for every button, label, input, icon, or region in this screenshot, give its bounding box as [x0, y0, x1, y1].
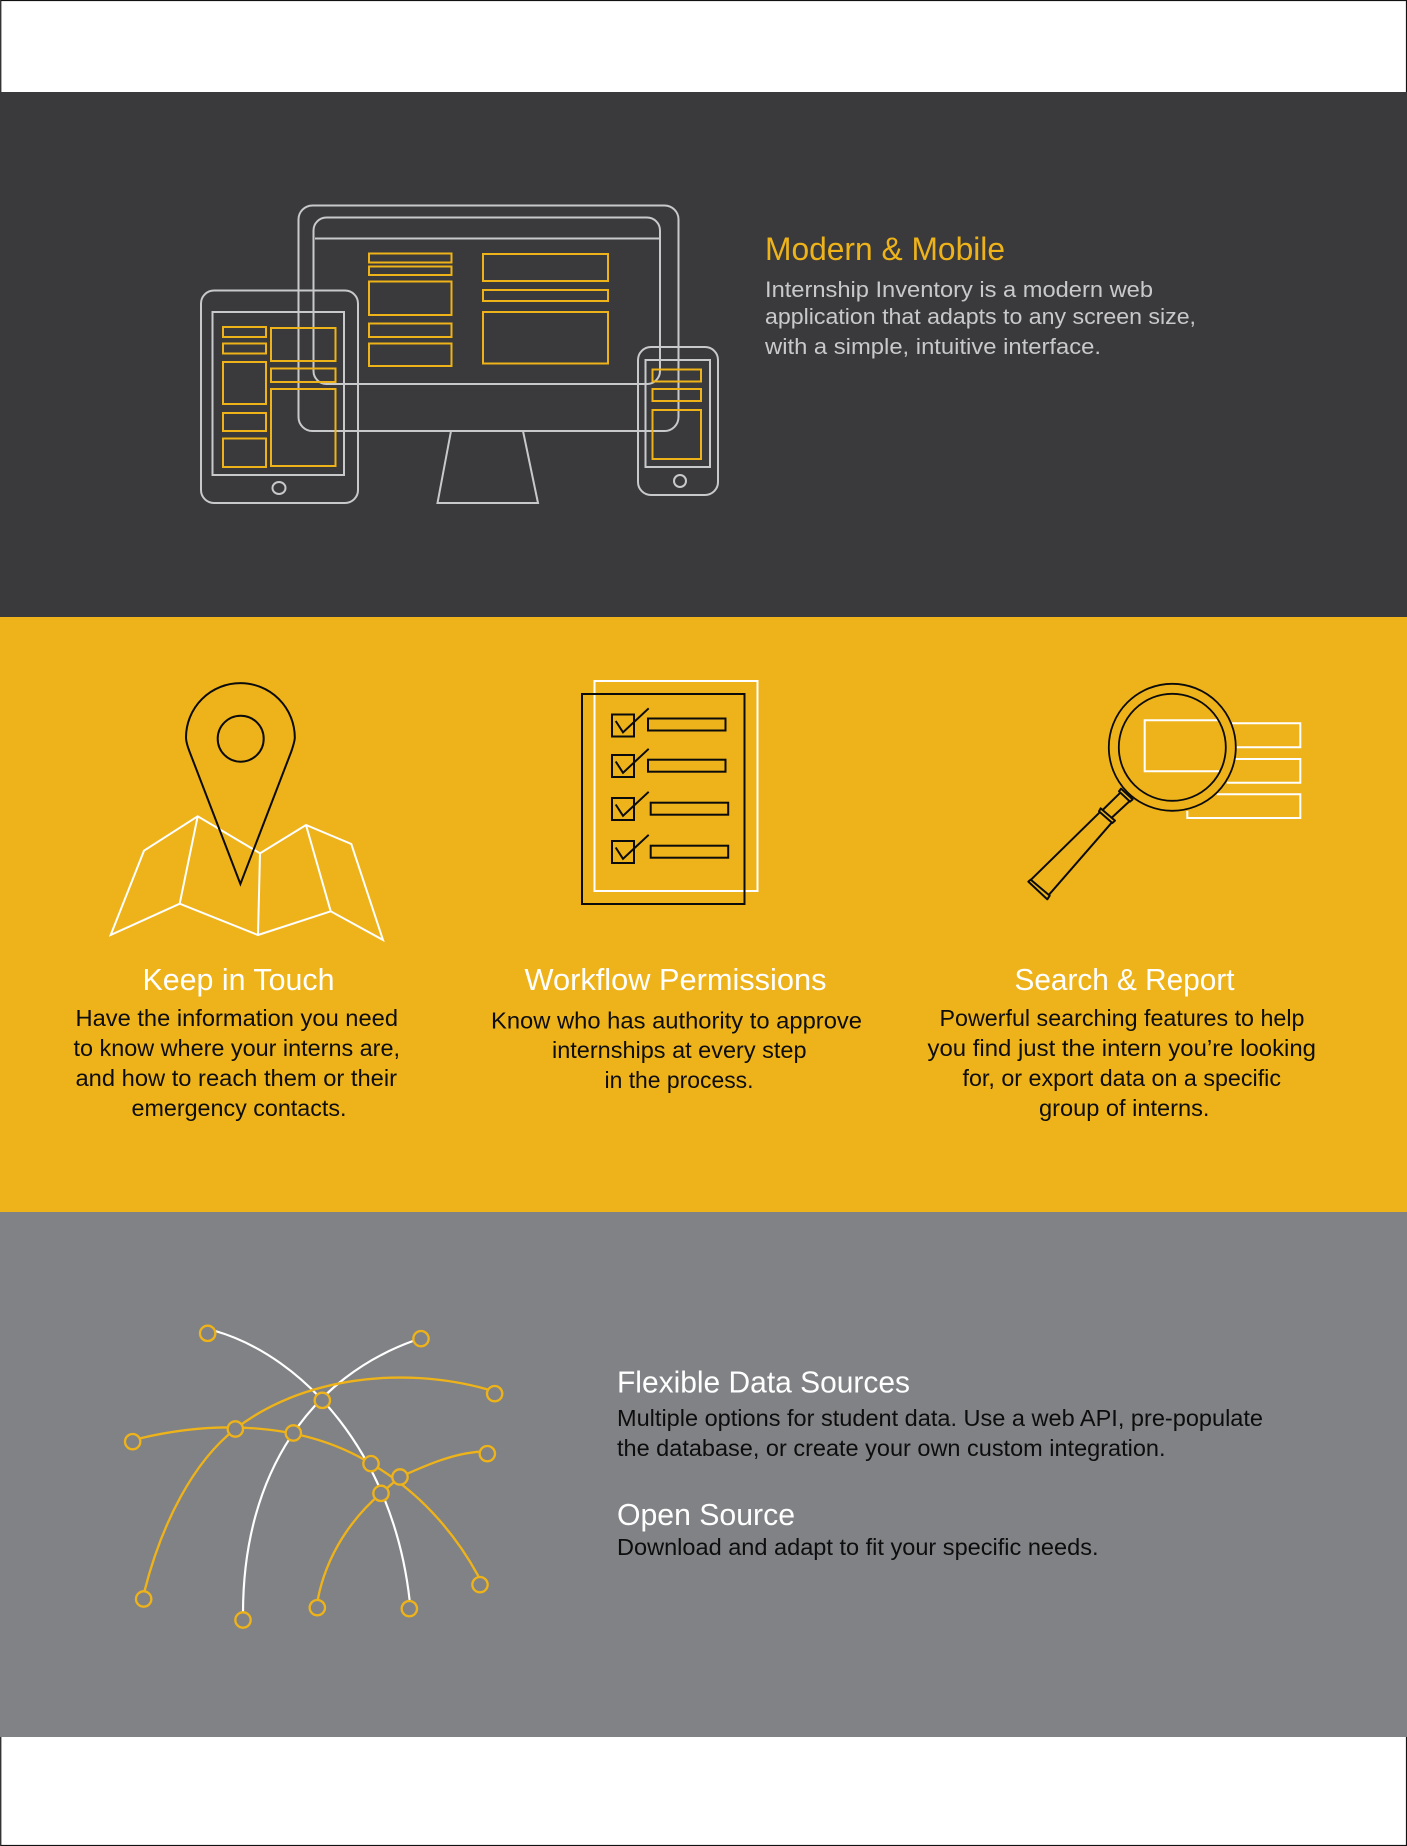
icon: checklist	[582, 681, 758, 904]
icon: phone	[638, 347, 718, 495]
text block: workflow permissions description	[491, 1008, 862, 1093]
text block: flexible data sources description	[617, 1405, 1263, 1461]
text block: modern and mobile description: Internship Inventory is a modern web	[765, 277, 1153, 302]
text block: search and report description: Powerful searching features to help	[940, 1005, 1304, 1031]
icon: desktop monitor	[298, 206, 678, 503]
icon: magnifying glass over records	[1028, 684, 1300, 899]
text block: workflow permissions description: internships at every step	[552, 1037, 806, 1063]
heading: Open Source: Open Source	[617, 1497, 795, 1532]
text block: modern and mobile description: with a simple, intuitive interface.	[764, 334, 1101, 359]
panel: features	[0, 617, 1407, 1212]
text block: keep in touch description: and how to reach them or their	[76, 1065, 397, 1091]
text block: search and report description: you find just the intern you’re looking	[928, 1035, 1316, 1061]
text block: search and report description: group of interns.	[1039, 1095, 1210, 1121]
icon: network of nodes	[125, 1326, 502, 1628]
text block: keep in touch description: Have the information you need	[76, 1005, 398, 1031]
heading: Keep in Touch: Keep in Touch	[142, 962, 334, 997]
icon: tablet	[201, 290, 358, 503]
text block: search and report description: for, or export data on a specific	[962, 1065, 1281, 1091]
heading: Workflow Permissions: Workflow Permissions	[524, 962, 826, 997]
heading: Search & Report: Search & Report	[1014, 962, 1235, 997]
panel: data sources	[0, 1212, 1407, 1737]
text block: modern and mobile description	[764, 277, 1196, 359]
text block: keep in touch description: to know where your interns are,	[74, 1035, 400, 1061]
heading: Modern & Mobile: Modern & Mobile	[765, 231, 1005, 267]
text block: search and report description	[928, 1005, 1316, 1121]
heading: Flexible Data Sources: Flexible Data Sources	[617, 1364, 910, 1400]
text block: workflow permissions description: in the process.	[604, 1067, 754, 1093]
panel: modern and mobile	[0, 92, 1407, 617]
text block: keep in touch description: emergency contacts.	[132, 1095, 346, 1121]
text block: workflow permissions description: Know who has authority to approve	[491, 1008, 862, 1034]
text block: modern and mobile description: application that adapts to any screen size,	[765, 304, 1196, 329]
text block: flexible data sources description: the database, or create your own custom integration.	[617, 1435, 1166, 1461]
icon: map with location pin	[111, 683, 383, 940]
text block: flexible data sources description: Multiple options for student data. Use a web API, pre-populate	[617, 1405, 1263, 1431]
text block: keep in touch description	[74, 1005, 400, 1121]
text block: open source description: Download and adapt to fit your specific needs.	[617, 1534, 1098, 1560]
